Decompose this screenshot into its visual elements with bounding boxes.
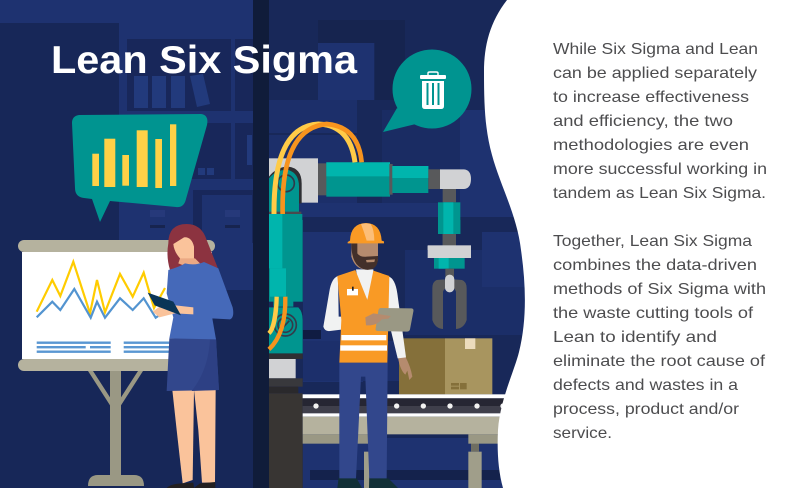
divider column [253, 0, 269, 488]
panel: factory background (right) [269, 0, 529, 488]
hair [167, 224, 218, 270]
text block: what Lean Six Sigma combines [553, 233, 766, 442]
presentation board with line chart [18, 240, 215, 486]
text block: what Lean Six Sigma combines: combines the data-driven [553, 257, 757, 274]
board stand [88, 371, 144, 486]
text block: what Lean Six Sigma combines: service. [553, 425, 612, 442]
conveyor belt [303, 394, 516, 488]
line chart: blue series [37, 289, 167, 318]
text block: Lean and Six Sigma in tandem: and efficiency, the two [553, 113, 733, 130]
clipboard [376, 308, 413, 332]
robot forearm and gripper [269, 220, 471, 349]
hard hat [348, 223, 384, 243]
shoes [167, 482, 215, 488]
title: Lean Six Sigma [51, 39, 357, 82]
robot upper arm and shoulder [269, 124, 471, 250]
panel: white text area with wavy edge [484, 0, 801, 488]
board text lines [37, 342, 170, 353]
text block: Lean and Six Sigma in tandem: more successful working in [553, 161, 767, 178]
text block: Lean and Six Sigma in tandem: While Six Sigma and Lean [553, 41, 758, 58]
text block: Lean and Six Sigma in tandem: methodologies are even [553, 137, 749, 154]
beard [351, 243, 378, 270]
safety vest [337, 270, 389, 363]
text block: what Lean Six Sigma combines: Together, Lean Six Sigma [553, 233, 752, 250]
badge [347, 289, 358, 295]
robot arm [269, 124, 471, 488]
blouse [167, 262, 233, 339]
board screen [22, 252, 212, 359]
line chart: yellow series [37, 262, 165, 313]
board rails [18, 240, 215, 371]
text block: what Lean Six Sigma combines: process, product and/or [553, 401, 740, 418]
text block: Lean and Six Sigma in tandem [553, 41, 767, 202]
text block: Lean and Six Sigma in tandem: to increase effectiveness [553, 89, 749, 106]
trousers [339, 363, 388, 478]
worker with hard hat and tablet [323, 223, 413, 488]
conveyor and cardboard box [303, 338, 516, 488]
neck [178, 258, 200, 267]
text block: what Lean Six Sigma combines: Lean to identify and [553, 329, 717, 346]
woman with tablet [148, 224, 233, 488]
text block: Lean and Six Sigma in tandem: can be applied separately [553, 65, 757, 82]
text block: what Lean Six Sigma combines: the waste cutting tools of [553, 305, 754, 322]
head [351, 243, 378, 269]
icon: teal speech bubble with trash can [383, 50, 472, 132]
face [173, 237, 194, 261]
text block: Lean and Six Sigma in tandem: tandem as Lean Six Sigma. [553, 185, 766, 202]
neck and shirt [356, 269, 374, 300]
boots [337, 477, 398, 488]
icon: teal speech bubble with bar chart [72, 114, 207, 222]
text block: what Lean Six Sigma combines: methods of Six Sigma with [553, 281, 766, 298]
robot base column [269, 297, 303, 488]
shirt sleeves [323, 276, 366, 331]
right hand [365, 313, 391, 325]
text block: what Lean Six Sigma combines: eliminate the root cause of [553, 353, 766, 370]
cardboard box [399, 338, 492, 394]
text block: what Lean Six Sigma combines: defects and wastes in a [553, 377, 738, 394]
legs [172, 390, 194, 483]
hand and tablet [153, 304, 193, 317]
panel: office background (left) [0, 0, 254, 488]
left hand [398, 357, 412, 380]
skirt [167, 338, 219, 391]
